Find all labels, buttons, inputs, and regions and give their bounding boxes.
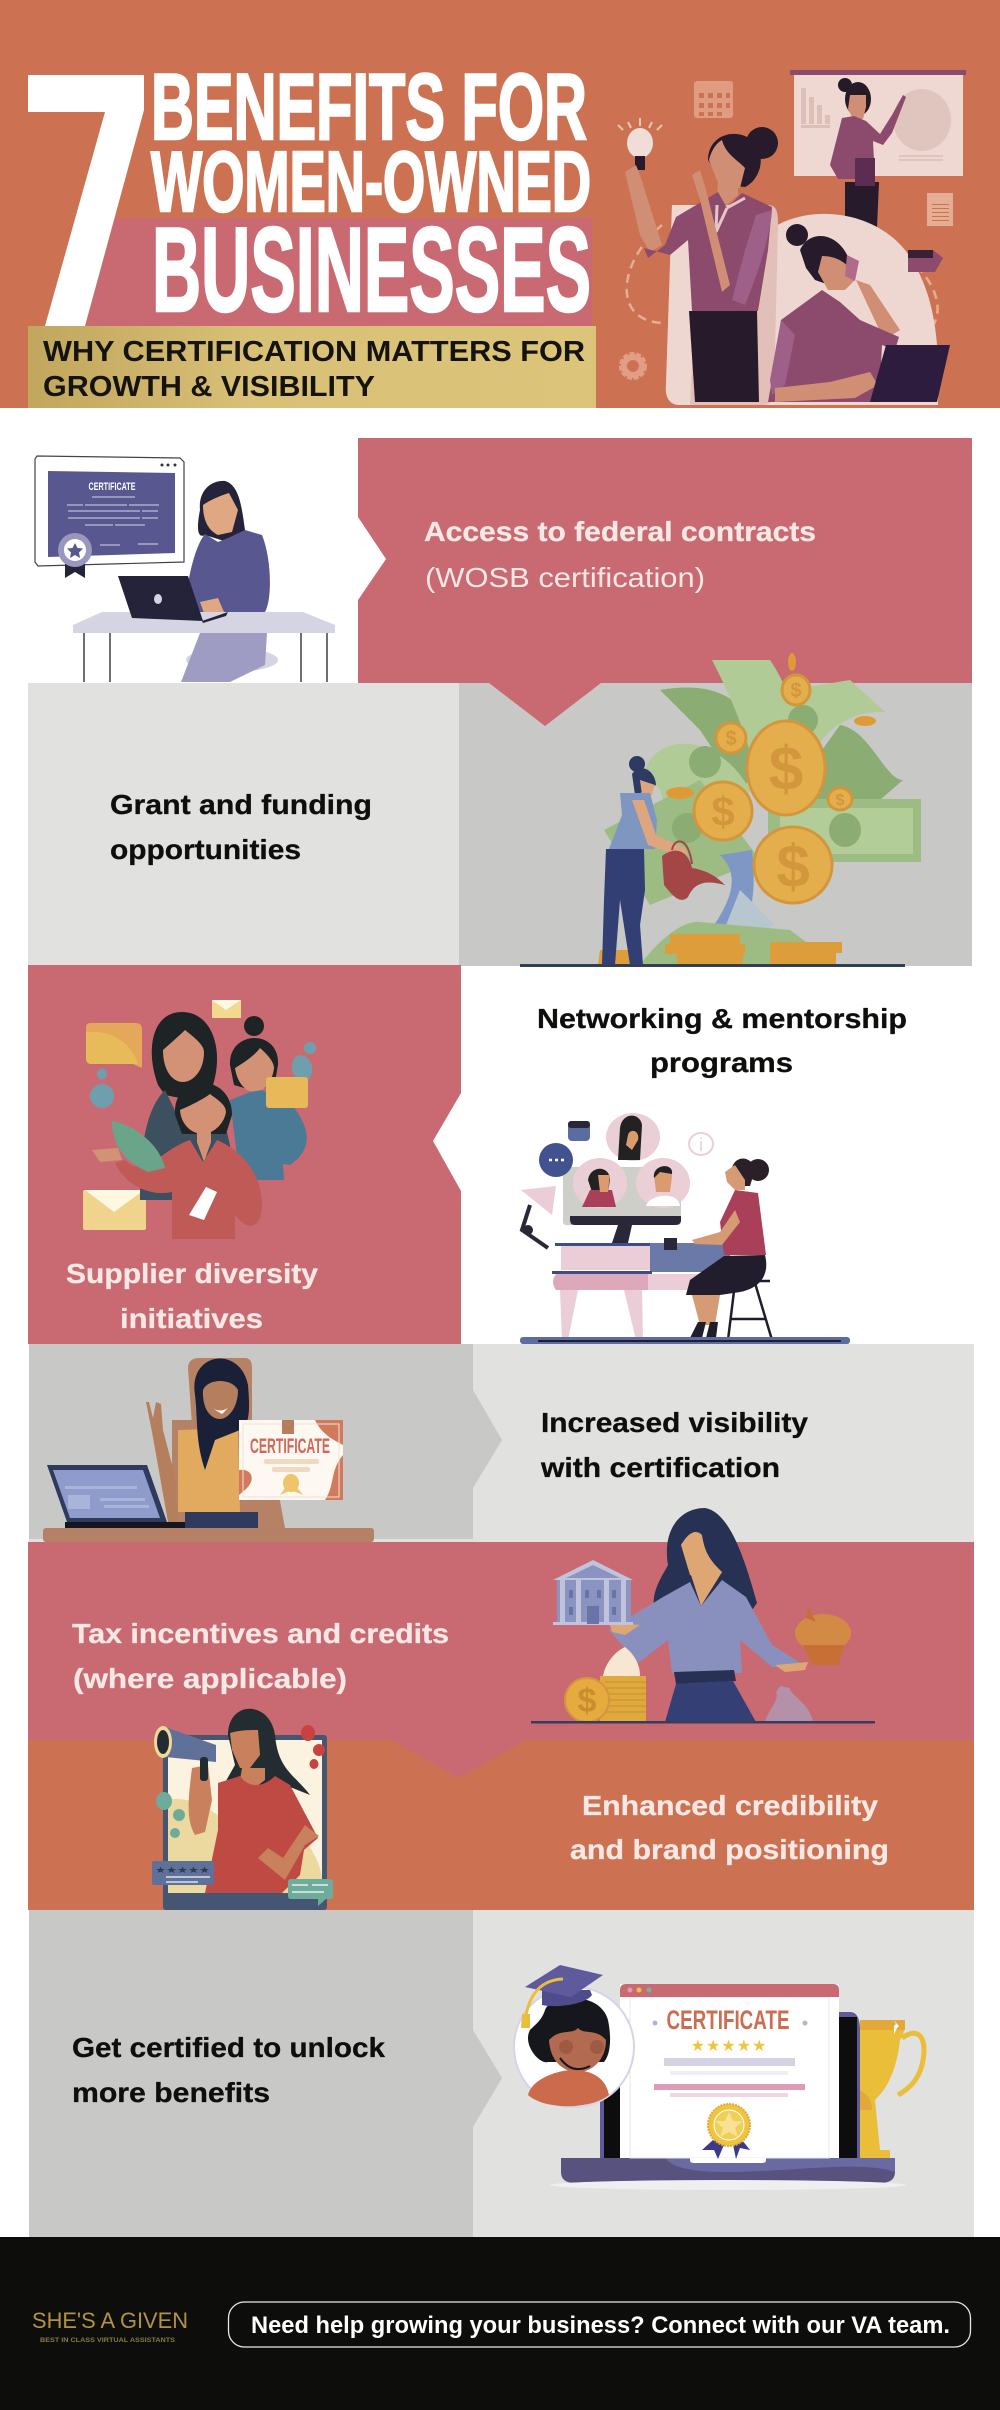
certificate page: CERTIFICATE xyxy=(666,2005,790,2035)
text xyxy=(570,1790,889,1865)
illustration: money tree: $ xyxy=(790,680,802,702)
woman xyxy=(198,481,251,545)
panel: header xyxy=(0,0,1000,408)
logo: BEST IN CLASS VIRTUAL ASSISTANTS xyxy=(40,2337,176,2344)
logo: SHE'S A GIVEN xyxy=(32,2308,188,2333)
illustration: money tree: $ xyxy=(711,788,735,835)
certificate xyxy=(239,1420,343,1500)
certificate page xyxy=(620,1984,839,2163)
subtitle box: WHY CERTIFICATION MATTERS FOR xyxy=(43,336,585,368)
laptop xyxy=(47,1465,167,1522)
megaphone xyxy=(154,1726,216,1781)
illustration: online mentoring: i xyxy=(699,1135,703,1155)
graduate portrait xyxy=(514,1965,634,2107)
illustration: woman holding certificate xyxy=(43,1358,374,1542)
table xyxy=(73,612,335,633)
text: Get certified to unlock xyxy=(72,2032,385,2063)
front woman xyxy=(92,1083,262,1239)
text: Supplier diversity xyxy=(66,1258,318,1289)
certificate: CERTIFICATE xyxy=(250,1435,330,1458)
text xyxy=(72,1618,449,1694)
projector screen xyxy=(790,70,966,228)
calendar icon xyxy=(694,81,733,118)
arch xyxy=(745,214,938,405)
subtitle box: GROWTH & VISIBILITY xyxy=(43,371,375,403)
title xyxy=(151,54,591,337)
woman with phone and laptop xyxy=(768,224,950,402)
chair xyxy=(666,205,778,405)
text: opportunities xyxy=(110,834,301,865)
text: (WOSB certification) xyxy=(425,562,705,593)
gear icon xyxy=(623,356,643,376)
heading: Networking & mentorship xyxy=(537,1003,907,1034)
bubbles and envelopes xyxy=(86,1023,142,1068)
title highlight xyxy=(85,218,592,326)
rating tag xyxy=(152,1861,214,1885)
coins and money bags: $ xyxy=(578,1682,597,1720)
call to action: Need help growing your business? Connect with our VA team. xyxy=(251,2312,950,2339)
certificate page: ★★★★★ xyxy=(691,2038,767,2055)
text: Tax incentives and credits xyxy=(72,1618,449,1649)
trunk xyxy=(708,850,754,934)
text: with certification xyxy=(540,1452,780,1483)
illustration: woman at laptop with certificate xyxy=(35,456,335,682)
bank xyxy=(553,1560,633,1625)
certificate window xyxy=(35,456,184,578)
dashed orbits xyxy=(627,225,938,345)
heading xyxy=(537,1003,907,1078)
illustration: influencer with megaphone xyxy=(152,1709,333,1910)
heading: programs xyxy=(650,1047,793,1078)
arrow xyxy=(473,1390,502,1488)
logo xyxy=(32,2308,188,2344)
panel: increased visibility xyxy=(29,1344,974,1542)
subtitle box xyxy=(28,326,596,408)
coins and money bags xyxy=(565,1647,813,1722)
panel: get certified xyxy=(29,1910,974,2237)
text: Increased visibility xyxy=(541,1407,808,1438)
illustration: money tree: $ xyxy=(769,735,803,804)
laptop xyxy=(550,2012,906,2190)
text: Enhanced credibility xyxy=(582,1790,878,1821)
illustration: money tree xyxy=(520,653,921,967)
mentor xyxy=(686,1158,772,1340)
back right woman xyxy=(230,1016,307,1180)
panel: footer xyxy=(0,2237,1000,2410)
raised arm xyxy=(625,165,662,252)
woman with bulb xyxy=(618,118,778,402)
arrow xyxy=(473,2030,502,2127)
title: BUSINESSES xyxy=(152,203,591,337)
heading: Access to federal contracts xyxy=(424,516,816,547)
coins xyxy=(694,675,852,903)
text: initiatives xyxy=(120,1303,263,1334)
trophy xyxy=(860,2020,924,2158)
illustration: business women xyxy=(618,70,966,405)
certificate window: CERTIFICATE xyxy=(88,481,136,493)
laptop xyxy=(118,576,203,621)
illustration: woman balancing finance xyxy=(531,1508,875,1724)
text xyxy=(540,1407,808,1483)
illustration: money tree: $ xyxy=(725,728,737,750)
title: BENEFITS FOR xyxy=(151,54,587,159)
text: more benefits xyxy=(72,2077,270,2108)
piggy bank xyxy=(795,1607,851,1665)
panel: supplier diversity xyxy=(28,965,461,1344)
chat bubble xyxy=(288,1879,333,1906)
rating tag: ★★★★★ xyxy=(155,1865,210,1875)
woman watering xyxy=(602,756,725,965)
text: and brand positioning xyxy=(570,1834,889,1865)
title: WOMEN-OWNED xyxy=(151,135,591,230)
call to action xyxy=(228,2302,970,2347)
panel: grant and funding xyxy=(28,683,972,966)
reactions xyxy=(156,1725,325,1838)
text: Grant and funding xyxy=(110,789,372,820)
panel: enhanced credibility xyxy=(28,1740,974,1910)
coin stacks xyxy=(598,934,842,965)
back left woman xyxy=(140,1012,236,1200)
document icon xyxy=(927,193,953,226)
text xyxy=(72,2032,385,2108)
stool and legs xyxy=(84,633,327,682)
illustration: money tree: $ xyxy=(836,792,845,809)
text xyxy=(66,1258,318,1334)
illustration: money tree: $ xyxy=(776,833,810,900)
panel: federal contracts xyxy=(358,438,972,683)
panel: tax incentives xyxy=(28,1542,974,1778)
illustration: three women xyxy=(83,1000,316,1239)
yellow note xyxy=(266,1077,308,1108)
illustration: online mentoring xyxy=(520,1113,850,1344)
numeral 7 xyxy=(28,75,144,326)
text: (where applicable) xyxy=(73,1663,347,1694)
text xyxy=(110,789,372,865)
arrow xyxy=(489,683,601,726)
illustration: certificate on laptop xyxy=(514,1965,924,2190)
panel: networking xyxy=(520,1003,907,1344)
